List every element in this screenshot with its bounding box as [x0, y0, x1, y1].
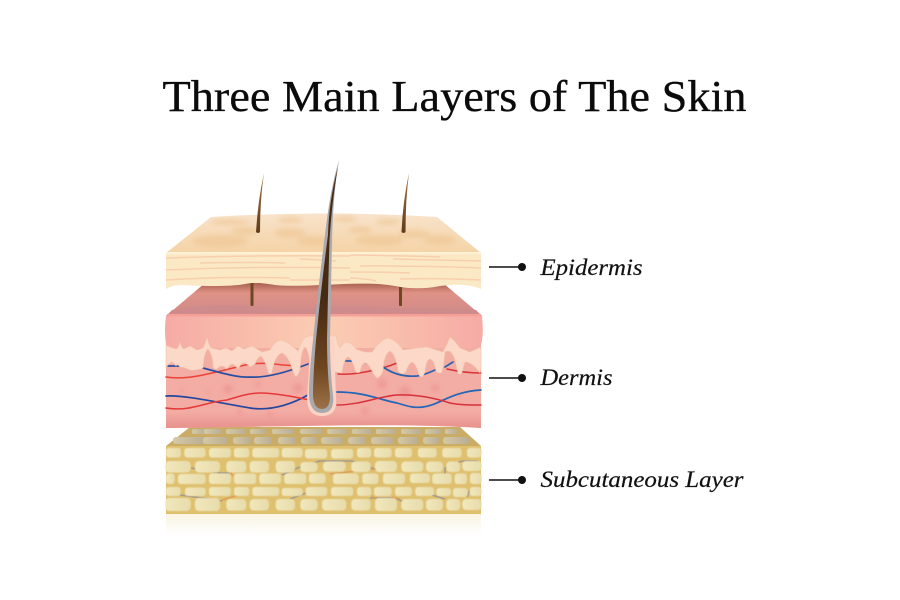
thin hair: left	[256, 173, 264, 233]
small hair stubs between layers	[250, 282, 402, 306]
dermis top surface	[166, 283, 482, 316]
subcutaneous layer	[165, 427, 482, 536]
epidermis	[166, 214, 481, 289]
epidermis strata lines	[166, 255, 481, 281]
upper red right	[338, 363, 481, 374]
papillae band	[166, 336, 481, 378]
illustration: skin cross-section	[165, 160, 483, 536]
connective strands	[180, 461, 478, 504]
label: epidermis	[489, 255, 643, 280]
upper blue left	[168, 364, 308, 377]
label: subcutaneous layer: Subcutaneous Layer	[540, 467, 745, 492]
dermis front block	[165, 316, 483, 428]
upper blue right	[346, 361, 453, 376]
blood vessels	[166, 361, 481, 378]
dermis dots	[180, 379, 462, 417]
lower dermis	[166, 348, 481, 428]
thin hair: right	[402, 173, 409, 233]
epidermis top surface	[166, 214, 481, 253]
upper red left	[166, 363, 300, 378]
label: dermis: Dermis	[539, 365, 613, 390]
large hair shaft and follicle	[307, 160, 339, 416]
title: Three Main Layers of The Skin	[162, 72, 746, 121]
label: dermis	[489, 365, 613, 390]
label: epidermis: Epidermis	[539, 255, 643, 280]
lower blood vessels	[166, 390, 481, 409]
epidermis front block	[166, 252, 481, 289]
dermis	[165, 283, 483, 428]
